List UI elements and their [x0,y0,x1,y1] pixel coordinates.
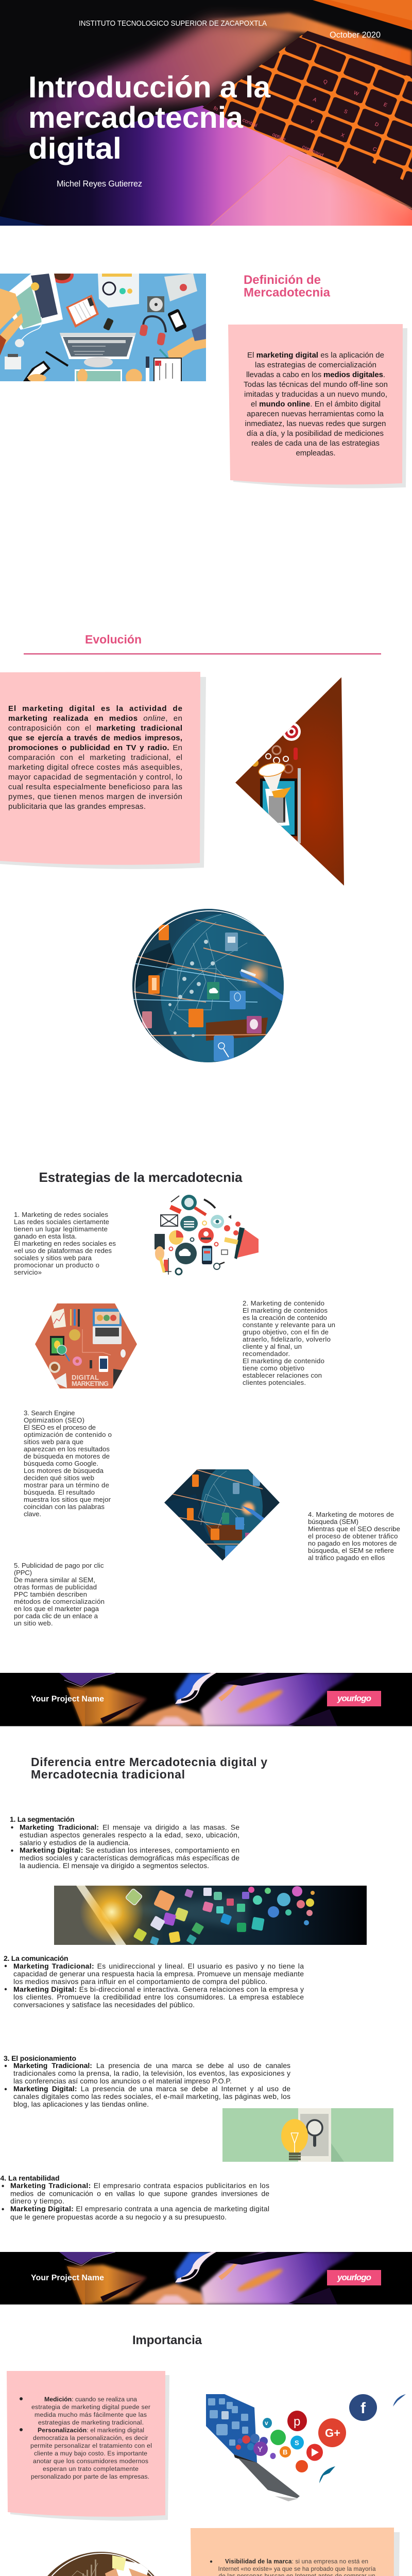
strategy 5 text: otras formas de publicidad [14,1583,97,1591]
strategy 1 text: «el uso de plataformas de redes [14,1247,112,1255]
strategy 5 text: De manera similar al SEM, [14,1576,95,1584]
section: la comunicación: Marketing Tradicional: Es unidireccional y lineal. El usuario es pasivo y no tiene la [13,1962,304,1970]
definition text: día a día, y la posibilidad de mediciones [247,429,384,438]
image: circular desk with icons [47,2552,154,2576]
strategy 5 text: PPC también describen [14,1590,87,1598]
image: laptop with social icons: Y [258,2445,263,2454]
author: Michel Reyes Gutierrez [57,179,142,189]
heading: definición [244,273,331,300]
strategy 1 text: 1. Marketing de redes sociales [14,1211,108,1218]
strategy 1 text: El marketing en redes sociales es [14,1240,116,1247]
image: laptop with social icons: f [360,2400,366,2417]
section: la segmentación: Marketing Digital: Se estudian los intereses, comportamiento en [20,1846,239,1854]
strategy 4 text [308,1511,400,1562]
strategy 4 text: no pagado en los motores de [308,1539,397,1547]
definition text: reales de cada una de las estrategias [251,439,380,448]
strategy 4 text: el proceso de obtener tráfico [308,1532,398,1540]
strategy 5 text: 5. Publicidad de pago por clic [14,1562,104,1569]
banner 2 [0,2252,412,2304]
evolution text: El marketing digital es la actividad de [8,704,182,713]
section: el posicionamiento: Marketing Digital: La presencia de una marca se debe al Internet y al uso de [13,2084,290,2093]
strategy 2 text: El marketing de contenidos [243,1307,328,1314]
note text: Medición: cuando se realiza una [44,2396,137,2403]
image: laptop with social icons: v [265,2419,268,2427]
strategy 2 text: El marketing de contenido [243,1357,324,1365]
panel: definition note [228,324,407,488]
note text: personalizado por parte de las empresas. [31,2473,149,2480]
note text: Visibilidad de la marca: si una empresa no está en [225,2558,368,2565]
image: laptop with social icons: G+ [325,2427,340,2439]
evolution text: contraposición con el marketing tradicional [8,724,182,733]
evolution text [8,704,182,811]
hero photo: laptop keyboard: Q [322,79,329,86]
strategy 3 text: mostrar para un término de [24,1481,109,1489]
section: la rentabilidad: Marketing Tradicional: El empresario contrata espacios publicitarios en los [10,2181,269,2190]
definition text: imitadas y traducidas a un nuevo mundo, [244,390,387,399]
panel: medición y personalización [7,2371,169,2521]
strategy 3 text: Los motores de búsqueda [24,1467,104,1475]
section: el posicionamiento: Marketing Tradicional: La presencia de una marca se debe al uso de canales [13,2061,290,2070]
note text [20,2396,152,2480]
evolution text: marketing realizada en medios online, en [8,714,182,723]
strategy 3 text: sitios web para que [24,1438,83,1446]
section: la rentabilidad: 4. La rentabilidad [0,2174,60,2182]
institute name: INSTITUTO TECNOLOGICO SUPERIOR DE ZACAPOXTLA [79,19,267,28]
note text: Personalización: el marketing digital [38,2427,144,2434]
hero photo: laptop keyboard: C [372,146,377,153]
image: hexagon digital marketing: MARKETING [72,1380,109,1387]
section: la segmentación: medios sociales y características demográficas más específicas de [20,1854,239,1862]
section: el posicionamiento: tradicionales como la prensa, la radio, la televisión, los eventos, las exposiciones y [13,2069,290,2077]
section: el posicionamiento: las conferencias así como los anuncios o el material impreso P.O.P. [13,2077,232,2085]
strategy 2 text: grupo objetivo, con el fin de [243,1328,329,1336]
definition text: llevadas a cabo en los medios digitales. [246,370,385,379]
section: el posicionamiento: 3. El posicionamiento [4,2054,76,2062]
definition text: el mundo online. En el ámbito digital [251,400,381,409]
strategy 5 text: por cada clic de un enlace a [14,1612,98,1620]
strategy 3 text: muestra los sitios que mejor [24,1496,111,1503]
definition text: las estrategias de comercialización [255,361,376,369]
strategy 5 text: un sitio web. [14,1619,53,1627]
hero photo: laptop keyboard: command [301,144,324,159]
strategy 2 text: establecer relaciones con [243,1371,322,1379]
definition text: aparecen nuevas herramientas como la [247,410,384,418]
section: la comunicación: 2. La comunicación [4,1954,68,1962]
section: la comunicación: los clientes. Promueve la credibilidad entre los consumidores. La empresa establece [13,1993,304,2001]
evolution text: publicitaria que las grandes empresas. [8,802,146,811]
image: diamond network [164,1469,280,1561]
image: laptop with social icons: B [283,2448,287,2456]
hero photo: laptop keyboard: control [242,117,258,129]
evolution text: promociones o publicidad en TV y radio. En [8,743,182,752]
evolution text: cual resulta especialmente beneficioso para las [8,783,182,791]
title: digital [28,132,122,165]
strategy 1 text [14,1211,116,1276]
illustration: flat marketing desk [0,267,206,385]
hero photo: laptop keyboard [0,0,412,226]
image: apps from tablet [54,1880,367,1945]
hero photo: laptop keyboard: X [340,132,346,139]
image: laptop with social icons: S [295,2439,299,2447]
section: la rentabilidad: Marketing Digital: El empresario contrata a una agencia de marketing digital [10,2205,269,2213]
strategy 2 text: 2. Marketing de contenido [243,1299,324,1307]
definition text: Todas las técnicas del mundo off-line son [244,380,388,389]
strategy 1 text: Las redes sociales ciertamente [14,1218,109,1226]
image: light bulb on green [222,2108,393,2162]
section: la segmentación: Marketing Tradicional: El mensaje va dirigido a las masas. Se [20,1823,239,1832]
title: Introducción a la [28,71,271,104]
hero section [0,0,412,226]
strategy 1 text: servicio» [14,1268,42,1276]
strategy 2 text: cliente y al final, un [243,1343,302,1350]
hero photo: laptop keyboard: option [271,132,286,143]
evolution text: marketing digital ofrece costes más asequibles, [8,763,182,772]
heading: importancia: Importancia [132,2333,202,2347]
section: el posicionamiento: blog, las aplicaciones y las tiendas online. [13,2100,149,2108]
banner 2: yourlogo [337,2273,371,2282]
note text: estrategias de marketing tradicional. [38,2419,144,2426]
strategy 4 text: búsqueda, el SEM se refiere [308,1547,394,1554]
strategy 4 text: 4. Marketing de motores de [308,1511,394,1518]
image: hexagon digital marketing: DIGITAL [72,1374,99,1381]
strategy 5 text [14,1562,105,1627]
banner 2: Your Project Name [31,2274,104,2282]
note text: medida mucho más fácilmente que las [35,2411,147,2418]
note text: esperan un trato completamente [43,2465,139,2472]
section: la comunicación: conversaciones y satisface las necesidades del público. [13,2001,195,2009]
strategy 2 text: es la creación de contenido [243,1314,327,1321]
hero photo: laptop keyboard: Y [309,119,315,126]
strategy 3 text: El SEO es el proceso de [24,1423,96,1431]
strategy 4 text: Mientras que el SEO describe [308,1525,400,1533]
strategy 3 text: coincidan con las palabras [24,1503,105,1511]
image: triangle with megaphone [232,675,348,889]
strategy 2 text [243,1299,335,1386]
strategy 3 text: optimización de contenido o [24,1431,112,1438]
definition text: El marketing digital es la aplicación de [247,351,384,360]
section: la rentabilidad: que le genere propuestas acorde a su negocio y a su presupuesto. [10,2213,227,2221]
definition text: empleadas. [296,449,336,457]
strategy 2 text: recomendador. [243,1350,290,1358]
strategy 3 text [24,1409,112,1518]
strategy 3 text: deciden qué sitios web [24,1474,94,1482]
note text: cliente a muy bajo costo. Es importante [34,2450,147,2457]
title [28,71,271,165]
date: October 2020 [330,30,381,40]
image: laptop with social icons [206,2394,406,2501]
section: la comunicación [4,1954,304,2009]
heading: definición: Mercadotecnia [244,285,331,300]
heading: diferencia [31,1755,267,1781]
banner 1 [0,1673,412,1726]
panel: evolution note [0,672,206,869]
panel: beneficios [191,2528,400,2576]
evolution text: comparación con el marketing tradicional, el [8,753,182,762]
evolution text: mayor capacidad de segmentación y control, lo [8,773,182,782]
banner 1: yourlogo [337,1693,371,1703]
hero photo: laptop keyboard: fn [213,106,219,112]
title: mercadotecnia [28,101,244,134]
note text: estrategia de marketing digital puede ser [31,2403,150,2411]
note text [210,2558,377,2576]
note text: anotar que los consumidores modernos [33,2458,148,2465]
hero photo: laptop keyboard: S [343,109,349,115]
strategy 1 text: promocionar un producto o [14,1261,99,1269]
strategy 3 text: aparezcan en los resultados [24,1445,110,1453]
hero photo: laptop keyboard: W [353,90,359,97]
strategy 3 text: de búsqueda en motores de [24,1452,110,1460]
evolution text: que se ejercía a través de medios impresos, [8,734,182,742]
section: la comunicación: Marketing Digital: Es bi-direccional e interactiva. Genera relaciones con la empresa y [13,1985,304,1993]
strategy 2 text: clientes potenciales. [243,1379,306,1386]
strategy 3 text: clave. [24,1510,41,1518]
hero photo: laptop keyboard: A [312,97,318,104]
strategy 2 text: tiene como objetivo [243,1364,304,1372]
section: la rentabilidad: dinero y tiempo. [10,2197,64,2205]
note text: permite personalizar el tratamiento con el [30,2442,152,2449]
section: la comunicación: capacidad de generar una respuesta hacia la empresa. Promueve un mensaje mediante [13,1970,304,1978]
heading: estrategias: Estrategias de la mercadotecnia [39,1170,243,1185]
strategy 2 text: constante y relevante para un [243,1321,335,1329]
strategy 4 text: búsqueda (SEM) [308,1518,358,1526]
icon cluster: marketing megaphone [154,1195,259,1275]
image: hexagon digital marketing [35,1303,137,1388]
section: la segmentación: estudian aspectos generales respecto a la edad, sexo, ubicación, [20,1831,239,1839]
heading: evolución: Evolución [85,633,142,646]
heading: definición: Definición de [244,273,321,287]
definition text [244,351,388,457]
note text: Internet «no existe» ya que se ha probado que la mayoría [218,2566,376,2572]
hero photo: laptop keyboard: E [383,102,388,109]
section: la rentabilidad [0,2174,269,2221]
section: la segmentación: salario y estudios de la audiencia. [20,1838,130,1846]
section: el posicionamiento: canales digitales como las redes sociales, el e-mail marketing, las páginas web, los [13,2092,290,2100]
strategy 2 text: atraerlo, fidelizarlo, volverlo [243,1335,331,1343]
strategy 5 text: (PPC) [14,1569,32,1577]
section: la segmentación: 1. La segmentación [10,1815,74,1823]
evolution text: pymes, que tienen menos margen de inversión [8,792,182,801]
strategy 3 text: Optimization (SEO) [24,1416,84,1424]
image: circular network globe [132,909,284,1062]
strategy 1 text: tienen un lugar legítimamente [14,1225,108,1233]
section: la segmentación [10,1815,239,1870]
section: la rentabilidad: medios de comunicación o en vallas lo que supone grandes inversiones de [10,2190,269,2198]
strategy 1 text: ganado en esta lista. [14,1232,77,1240]
strategy 5 text: métodos de comercialización [14,1598,105,1605]
strategy 1 text: sociales y sitios web para [14,1254,92,1262]
hero photo: laptop keyboard: D [374,122,380,128]
banner 1: Your Project Name [31,1695,104,1704]
strategy 4 text: al tráfico pagado en ellos [308,1554,385,1562]
definition text: inmediatez, las nuevas redes que surgen [245,419,386,428]
heading: diferencia: Diferencia entre Mercadotecnia digital y [31,1755,267,1769]
section: la segmentación: la audiencia. El mensaje va dirigido a segmentos selectos. [20,1861,209,1870]
strategy 3 text: búsqueda como Google. [24,1460,98,1467]
section: el posicionamiento [4,2054,290,2108]
note text: democratiza la personalización, es decir [33,2434,148,2442]
heading: diferencia: Mercadotecnia tradicional [31,1768,185,1781]
section: la comunicación: los medios masivos para influir en el comportamiento de compra del público. [13,1977,267,1986]
strategy 3 text: 3. Search Engine [24,1409,75,1417]
strategy 3 text: búsqueda. El resultado [24,1488,95,1496]
image: laptop with social icons: p [294,2415,300,2429]
strategy 5 text: en los que el marketer paga [14,1605,99,1613]
